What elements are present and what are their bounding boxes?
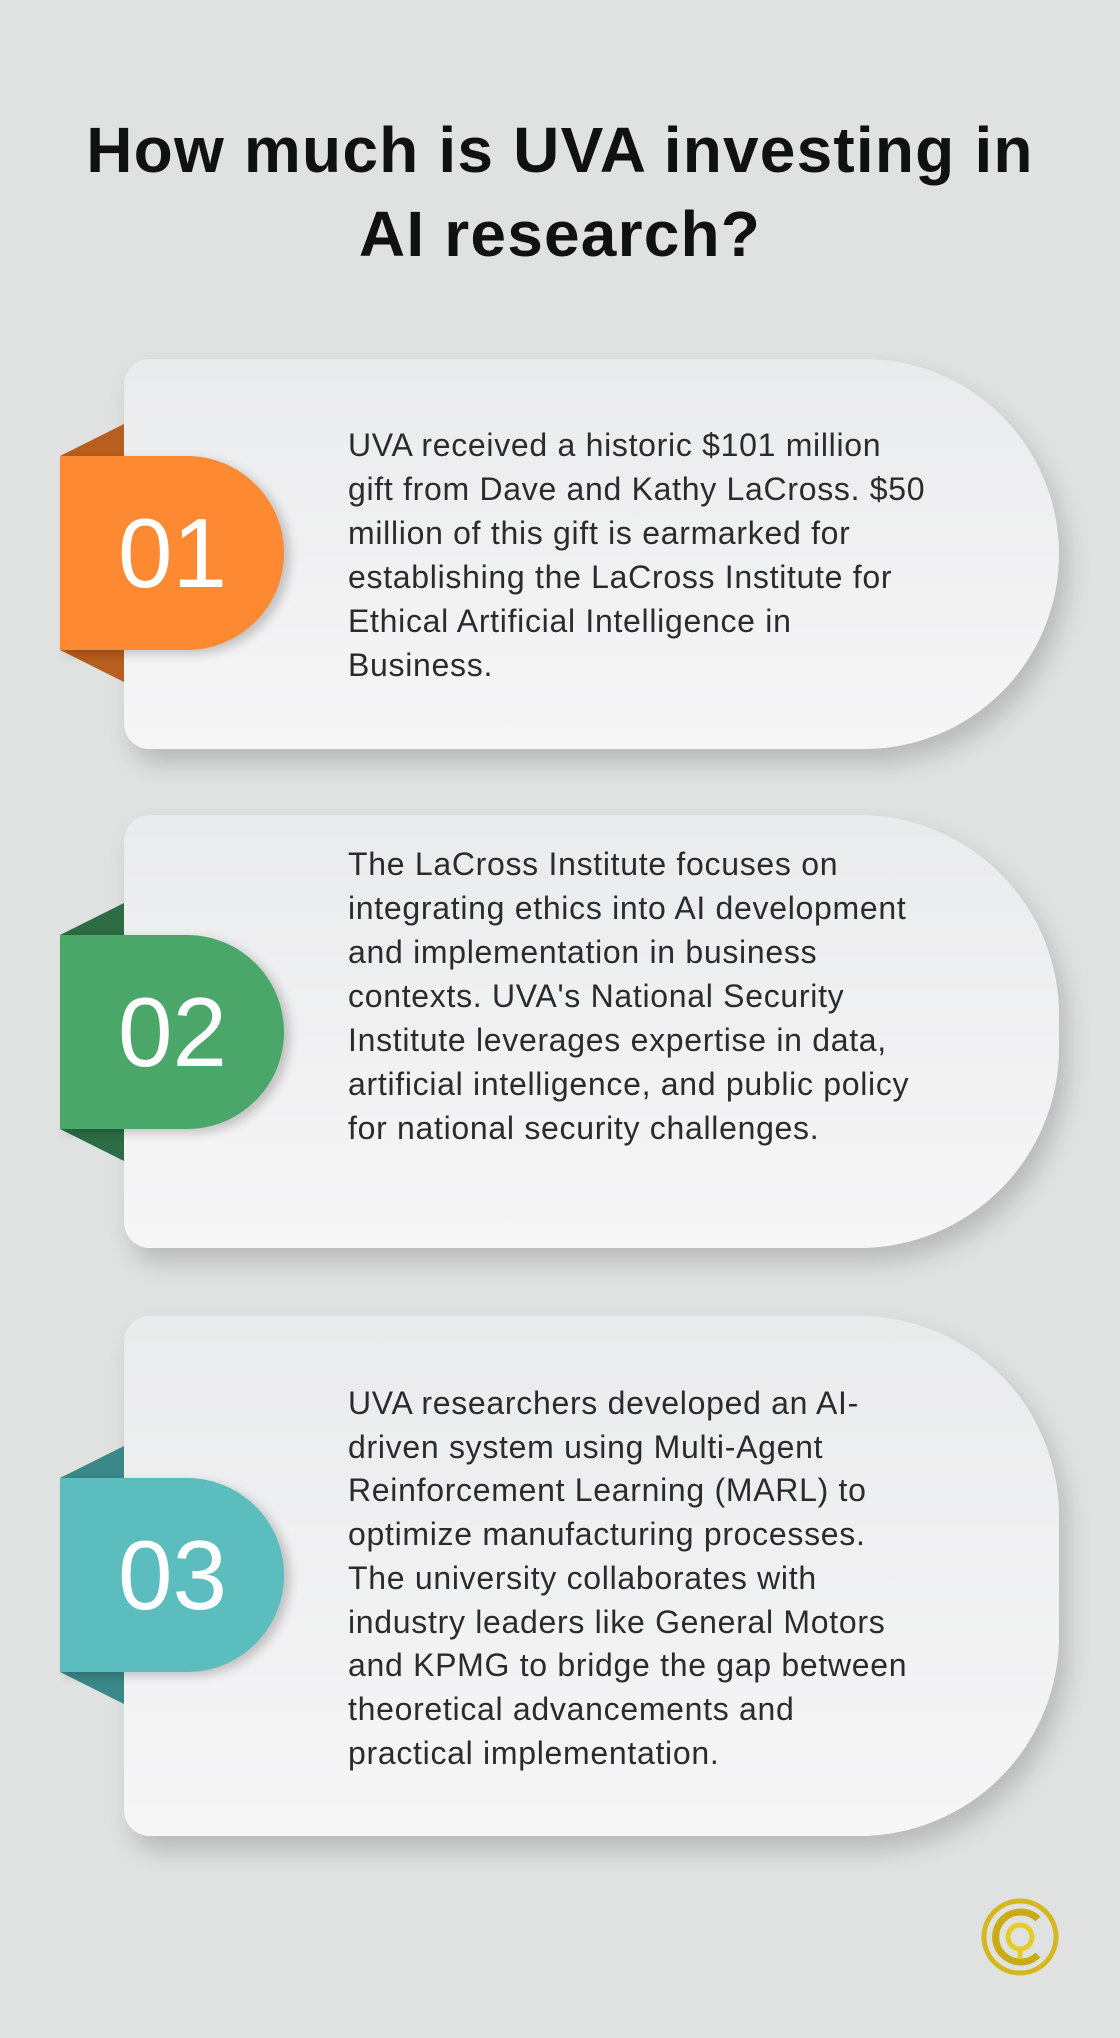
- text: card 3: [348, 1385, 907, 1771]
- text: card 2: Institute leverages expertise in data,: [348, 1022, 887, 1058]
- text: card 1: UVA received a historic $101 million: [348, 427, 881, 463]
- text: card 2: [348, 846, 909, 1146]
- fold: card 3: [60, 1446, 124, 1704]
- number tab 03: [60, 1478, 284, 1672]
- text: card 2: The LaCross Institute focuses on: [348, 846, 838, 882]
- panel: card 3: [124, 1316, 1059, 1836]
- text: card 1: Business.: [348, 647, 493, 683]
- number tab 03: 03: [118, 1520, 227, 1630]
- text: card 1: Ethical Artificial Intelligence in: [348, 603, 792, 639]
- text: card 3: and KPMG to bridge the gap between: [348, 1647, 907, 1683]
- panel: card 1: [124, 359, 1059, 749]
- text: card 3: theoretical advancements and: [348, 1691, 795, 1727]
- number tab 02: 02: [118, 977, 227, 1087]
- text: card 1: [348, 427, 925, 683]
- fold: card 1: [60, 424, 124, 682]
- text: card 1: gift from Dave and Kathy LaCross. $50: [348, 471, 925, 507]
- number tab 01: 01: [118, 498, 227, 608]
- text: card 2: for national security challenges.: [348, 1110, 819, 1146]
- text: card 1: establishing the LaCross Institute for: [348, 559, 892, 595]
- text: card 3: optimize manufacturing processes.: [348, 1516, 866, 1552]
- number tab 01: [60, 456, 284, 650]
- text: card 1: million of this gift is earmarked for: [348, 515, 851, 551]
- text: card 3: driven system using Multi-Agent: [348, 1429, 823, 1465]
- text: card 2: and implementation in business: [348, 934, 817, 970]
- title: [86, 114, 1034, 270]
- title: How much is UVA investing in: [86, 114, 1034, 186]
- text: card 3: practical implementation.: [348, 1735, 719, 1771]
- icon: logo: [982, 1898, 1058, 1976]
- text: card 2: contexts. UVA's National Security: [348, 978, 844, 1014]
- panel: card 2: [124, 815, 1059, 1248]
- title: AI research?: [359, 198, 761, 270]
- text: card 2: artificial intelligence, and public policy: [348, 1066, 909, 1102]
- text: card 3: UVA researchers developed an AI-: [348, 1385, 859, 1421]
- text: card 2: integrating ethics into AI development: [348, 890, 906, 926]
- text: card 3: industry leaders like General Motors: [348, 1604, 885, 1640]
- number tab 02: [60, 935, 284, 1129]
- text: card 3: The university collaborates with: [348, 1560, 817, 1596]
- text: card 3: Reinforcement Learning (MARL) to: [348, 1472, 867, 1508]
- fold: card 2: [60, 903, 124, 1161]
